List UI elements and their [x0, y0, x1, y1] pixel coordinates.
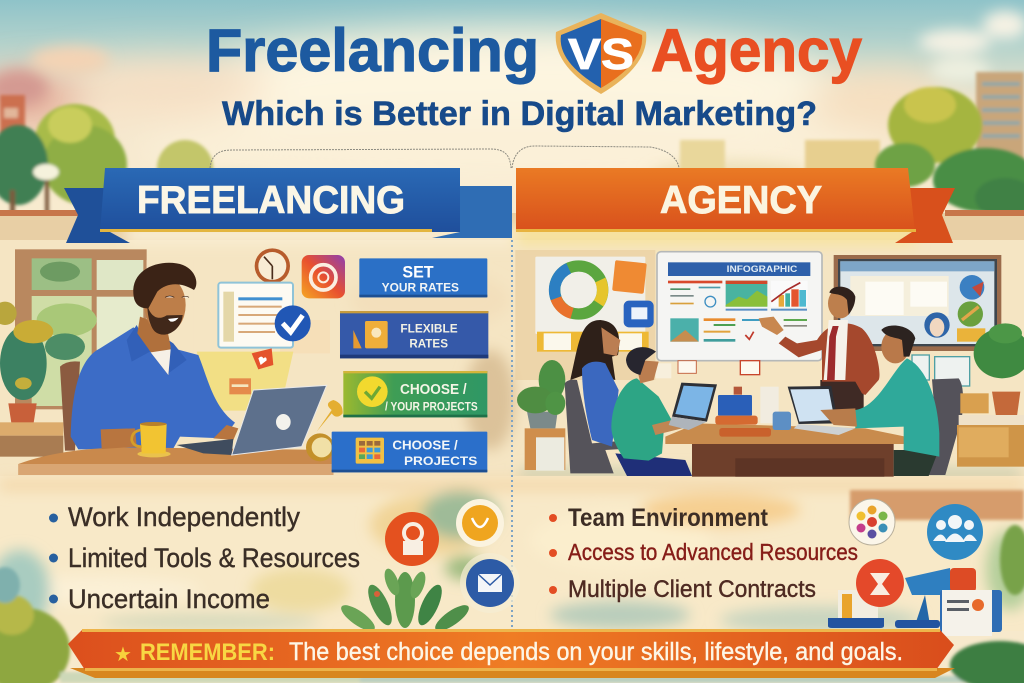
badge: choose your projects: / YOUR PROJECTS [385, 401, 478, 414]
suit [779, 323, 880, 395]
yellow note [197, 320, 330, 411]
head [144, 277, 186, 333]
badge: set your rates: SET [402, 263, 434, 282]
bullets [49, 514, 58, 604]
icon: team [927, 504, 983, 560]
presenter [759, 287, 880, 410]
trousers [894, 450, 939, 476]
title [206, 13, 863, 133]
hair [881, 325, 915, 357]
centre dotted divider [511, 240, 513, 630]
clock [255, 248, 290, 284]
blue top [582, 362, 619, 447]
desk [665, 423, 905, 477]
mug [132, 422, 171, 457]
laptop left [669, 383, 717, 430]
icon: gold key [306, 400, 343, 461]
shelf [0, 422, 63, 457]
icon: instagram [302, 255, 345, 298]
point 1: Work Independently [68, 502, 300, 532]
agency ribbon [516, 168, 955, 243]
notes under board [655, 361, 760, 378]
hair [570, 320, 619, 380]
icon: gold badge [456, 499, 504, 547]
cabinet [957, 393, 1024, 467]
badge: set your rates: YOUR RATES [382, 280, 459, 294]
star: ★ [114, 644, 132, 666]
hands [820, 408, 857, 427]
freelancing ribbon [64, 168, 512, 243]
wall tone [515, 250, 655, 380]
building left [0, 95, 25, 135]
seated woman in green [611, 347, 692, 476]
notebook checklist [218, 283, 293, 348]
arm [101, 428, 137, 449]
wall band [0, 210, 1024, 243]
point 3: Multiple Client Contracts [568, 576, 816, 603]
badge: flexible rates [340, 311, 488, 358]
lower panel background [0, 476, 1024, 634]
hair [829, 287, 855, 315]
title: freelancing: Freelancing [206, 17, 539, 84]
hand [759, 317, 784, 335]
laptop [177, 385, 327, 455]
plant right [974, 323, 1024, 416]
badge: set your rates [359, 258, 487, 297]
hair [626, 347, 656, 375]
seated man [820, 325, 939, 476]
point 1: Team Environment [568, 504, 769, 532]
badge: choose projects: PROJECTS [404, 455, 478, 468]
badge: flexible rates: FLEXIBLE [400, 321, 458, 335]
divider curves [210, 146, 679, 168]
remember banner [68, 629, 955, 678]
plant center [338, 567, 472, 635]
torso [71, 327, 235, 449]
remember label: REMEMBER: [140, 639, 275, 666]
point 3: Uncertain Income [68, 584, 270, 614]
icon: envelope [460, 553, 520, 613]
plant left [0, 302, 85, 425]
corner foliage [0, 525, 1024, 683]
point 2: Access to Advanced Resources [568, 539, 858, 565]
list: freelancing points [49, 502, 360, 614]
vs shield: VS [568, 30, 634, 79]
man [71, 263, 235, 449]
trousers [820, 380, 864, 410]
building right [680, 72, 1024, 180]
icon: heart bubble [252, 348, 273, 369]
neck and shirt [137, 317, 171, 375]
point 2: Limited Tools & Resources [68, 543, 360, 573]
shirt [611, 378, 675, 461]
badge: choose projects [332, 432, 487, 472]
bullets [549, 514, 557, 594]
woman [570, 320, 620, 447]
beard [147, 305, 183, 335]
tie [827, 326, 839, 380]
panel: freelancing scene [0, 248, 488, 475]
head [828, 288, 853, 318]
icon: megaphone desk [895, 568, 1002, 636]
title: agency: Agency [651, 17, 863, 84]
face [635, 360, 659, 383]
chair [60, 361, 80, 451]
icon: tablet chart [828, 590, 884, 628]
icon: orange badge [385, 512, 439, 566]
badge: choose your projects [343, 371, 487, 417]
badge: choose projects: CHOOSE / [392, 437, 458, 452]
icon: check badge [275, 305, 311, 341]
vs shield [556, 13, 646, 94]
laptop right [788, 386, 855, 435]
right screen [834, 255, 1001, 351]
small framed pictures [912, 355, 970, 386]
whiteboard: INFOGRAPHIC [727, 264, 798, 274]
ribbon text: AGENCY [660, 179, 822, 222]
chart poster [535, 257, 654, 352]
window [15, 249, 193, 409]
remember text: The best choice depends on your skills, lifestyle, and goals. [289, 638, 903, 666]
panel: agency scene [515, 250, 1024, 477]
desk [18, 447, 333, 475]
plant left [517, 360, 565, 471]
desk items [715, 387, 791, 437]
arm hands [652, 418, 682, 435]
left chair [565, 380, 632, 473]
badge: choose your projects: CHOOSE / [400, 382, 467, 398]
list: agency points [549, 504, 858, 603]
face [601, 327, 620, 356]
agency icons [828, 499, 1002, 636]
hair [133, 263, 196, 308]
trees [0, 87, 1024, 218]
shirt [855, 358, 939, 457]
icon: orange network [856, 559, 904, 607]
head [881, 330, 909, 363]
whiteboard [657, 252, 822, 361]
subtitle: Which is Better in Digital Marketing? [222, 95, 817, 133]
freelancing icons [385, 499, 520, 613]
icon: colour wheel [849, 499, 895, 545]
right chair [905, 378, 963, 475]
eyes and smile [165, 296, 189, 322]
badge: flexible rates: RATES [409, 337, 448, 351]
shirt [824, 320, 848, 380]
trousers [615, 453, 692, 476]
ribbon text: FREELANCING [137, 179, 405, 222]
